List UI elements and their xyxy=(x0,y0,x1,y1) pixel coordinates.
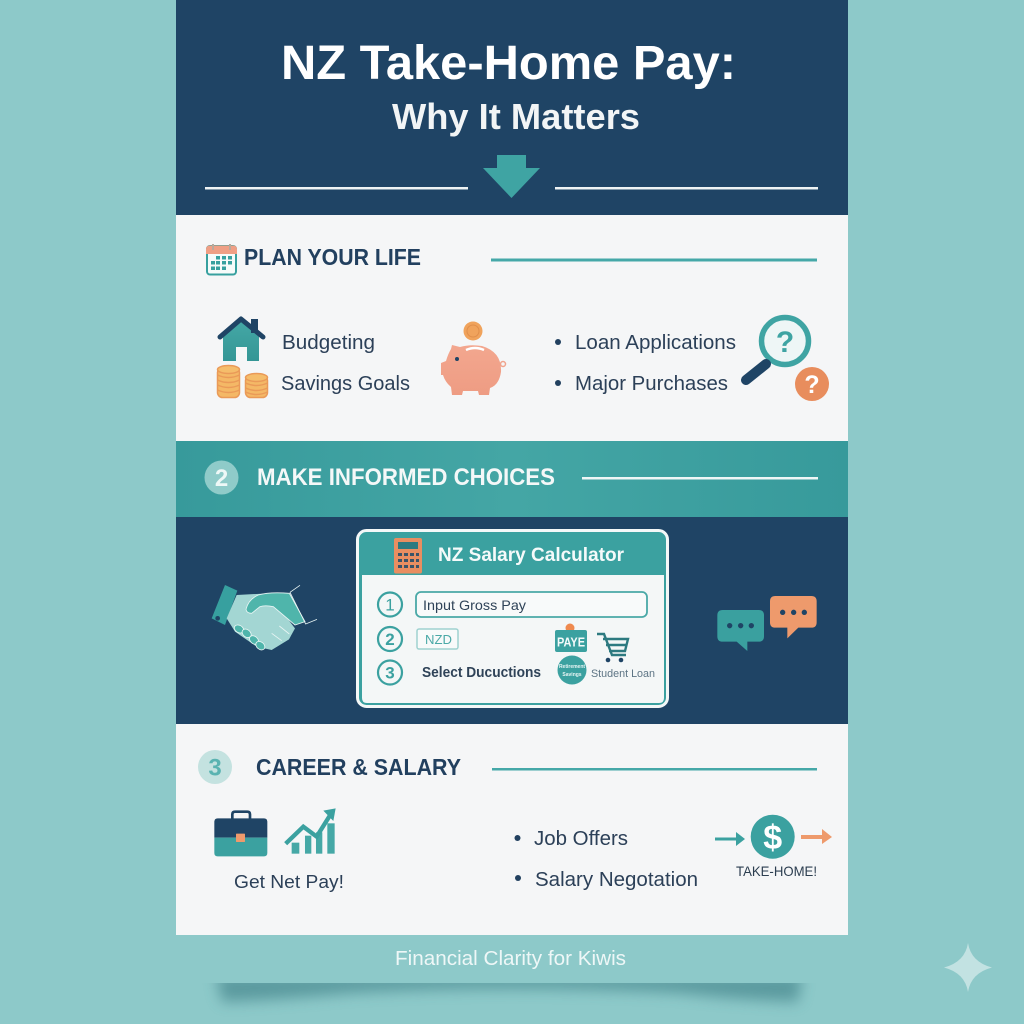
section rule xyxy=(492,768,817,770)
step badge 2: 2 xyxy=(215,465,228,492)
title: NZ Take-Home Pay: xyxy=(281,37,736,90)
calculator card xyxy=(358,530,668,706)
paye tag: PAYE xyxy=(557,636,585,650)
icon: piggy bank xyxy=(441,322,506,395)
step 3 xyxy=(378,660,541,684)
icon: handshake xyxy=(212,585,317,652)
icon: briefcase xyxy=(214,812,267,856)
icon: dollar coin: $ xyxy=(763,819,782,857)
bullet list: job offers and negotiation: Salary Negotation xyxy=(535,869,698,891)
step badge 3 xyxy=(198,750,232,784)
bullet list: loans and purchases xyxy=(555,332,736,395)
panel: header xyxy=(176,0,848,215)
section rule xyxy=(491,258,817,262)
icon: sparkle xyxy=(944,943,992,992)
panel: career and salary xyxy=(176,724,848,935)
step 3: 3 xyxy=(385,664,395,682)
retirement savings badge: Savings xyxy=(562,672,582,678)
step 2: 2 xyxy=(385,630,395,649)
icon: shopping cart xyxy=(597,634,628,662)
icon: speech bubbles xyxy=(717,596,817,651)
retirement savings badge xyxy=(558,656,586,684)
label: student loan: Student Loan xyxy=(591,668,655,680)
section rule xyxy=(582,477,818,480)
bullet list: job offers and negotiation: Job Offers xyxy=(534,828,628,850)
bullet list: loans and purchases: Loan Applications xyxy=(575,332,736,354)
heading: make informed choices: MAKE INFORMED CHOICES xyxy=(257,464,555,491)
subtitle: Why It Matters xyxy=(392,96,640,137)
step 1: Input Gross Pay xyxy=(423,597,526,613)
infographic xyxy=(176,0,992,1008)
icon: growth chart xyxy=(286,808,336,854)
arrow: down xyxy=(483,155,540,198)
paye tag xyxy=(555,624,587,652)
icon: magnifying glass xyxy=(746,318,808,380)
label: savings goals: Savings Goals xyxy=(281,373,410,395)
panel: make informed choices band xyxy=(176,441,848,517)
step 3: Select Ducuctions xyxy=(422,665,541,681)
icon: calculator xyxy=(394,538,422,574)
footer text: Financial Clarity for Kiwis xyxy=(395,948,626,970)
arrow: orange out xyxy=(801,829,832,844)
bullet list: loans and purchases: Major Purchases xyxy=(575,373,728,395)
step 2 xyxy=(378,627,458,651)
icon: question badge xyxy=(795,367,829,401)
label: budgeting: Budgeting xyxy=(282,332,375,354)
step badge 2 xyxy=(204,460,238,494)
ground shadow xyxy=(216,975,802,1002)
panel: calculator section xyxy=(176,517,848,724)
bullet list: job offers and negotiation xyxy=(514,828,698,891)
icon: house xyxy=(220,319,263,361)
label: take-home: TAKE-HOME! xyxy=(736,863,817,879)
header divider left xyxy=(205,187,468,190)
arrow: teal in xyxy=(715,832,745,846)
heading: career and salary: CAREER & SALARY xyxy=(256,754,461,780)
icon: magnifying glass: ? xyxy=(776,326,794,359)
label: get net pay: Get Net Pay! xyxy=(234,872,344,892)
icon: coins xyxy=(218,366,268,398)
header divider right xyxy=(555,187,818,190)
retirement savings badge: Retirement xyxy=(559,664,585,670)
card title: NZ Salary Calculator xyxy=(438,545,625,566)
icon: dollar coin xyxy=(751,815,795,859)
icon: calendar xyxy=(206,244,237,274)
step 1: 1 xyxy=(385,596,395,614)
panel: plan your life xyxy=(176,215,848,441)
step badge 3: 3 xyxy=(208,754,222,782)
icon: question badge: ? xyxy=(804,371,820,399)
heading: plan your life: PLAN YOUR LIFE xyxy=(244,244,421,270)
step 2: NZD xyxy=(425,632,452,647)
step 1 xyxy=(378,592,647,617)
